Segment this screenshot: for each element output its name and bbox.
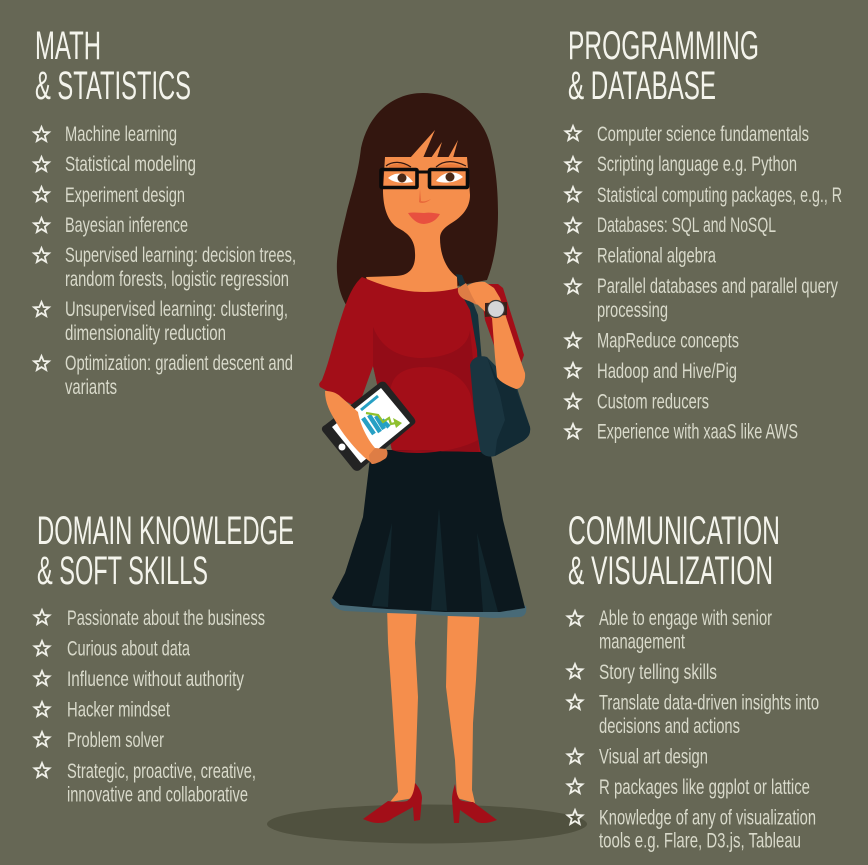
skill list: domain knowledge and soft skills: Curious about data [67,638,190,660]
ground shadow [267,804,587,844]
skill list: math and statistics: Supervised learning: decision trees, [65,244,296,267]
skill list: programming and database: Custom reducers [597,390,709,414]
face and neck [366,157,470,300]
skill list: programming and database [566,123,842,444]
skill list: math and statistics: random forests, logistic regression [65,268,289,291]
skill list: domain knowledge and soft skills: Strategic, proactive, creative, [67,760,256,783]
forehead wedges between fringe strands [410,130,458,158]
heading: math and statistics: MATH [35,24,101,68]
hair [337,93,498,308]
skill list: communication and visualization: Visual art design [599,746,708,768]
bag [470,356,530,457]
skill list: math and statistics: variants [65,376,117,399]
skill list: programming and database: processing [597,299,668,322]
skill list: math and statistics: Statistical modeling [65,153,196,176]
shirt [319,277,482,452]
skill list: math and statistics: dimensionality reduction [65,322,226,345]
wristwatch [485,300,507,318]
skill list: communication and visualization [568,607,819,852]
heading: communication and visualization [568,509,780,593]
bag strap [456,274,482,362]
heading: math and statistics [35,24,191,108]
skirt [330,450,526,618]
skill list: programming and database: Databases: SQL and NoSQL [597,214,776,237]
tablet chart [361,396,402,434]
skill list: domain knowledge and soft skills: Influence without authority [67,668,244,691]
right arm [466,282,525,389]
skill list: domain knowledge and soft skills [34,607,265,806]
skill list: math and statistics: Machine learning [65,123,177,146]
panel: math and statistics [34,24,296,399]
nose [419,189,431,203]
skill list: math and statistics [34,123,296,399]
heading: math and statistics: & STATISTICS [35,64,191,108]
bag shadow fold [487,357,530,456]
red shoes [363,783,497,823]
glasses [381,170,468,188]
illustration: woman data scientist [267,93,587,844]
skill list: programming and database: Relational algebra [597,244,716,268]
skill list: domain knowledge and soft skills: Hacker mindset [67,698,170,722]
skill list: communication and visualization: management [599,630,685,654]
shirt shading [373,327,479,453]
panel: communication and visualization [568,509,819,852]
heading: domain knowledge and soft skills: DOMAIN KNOWLEDGE [37,509,294,553]
eyebrows [386,162,466,167]
skill list: communication and visualization: decisions and actions [599,715,740,738]
eye shadow [389,164,463,171]
heading: programming and database: & DATABASE [568,64,716,108]
skill list: programming and database: MapReduce concepts [597,330,739,352]
skill list: domain knowledge and soft skills: innovative and collaborative [67,784,248,806]
legs [387,605,480,803]
left arm [325,391,375,463]
left hand [369,448,388,464]
skill list: math and statistics: Experiment design [65,184,185,207]
skill list: programming and database: Hadoop and Hive/Pig [597,360,737,383]
skill list: domain knowledge and soft skills: Passionate about the business [67,607,265,630]
skill list: communication and visualization: Story telling skills [599,661,717,684]
eyes [388,172,463,183]
heading: domain knowledge and soft skills [37,509,294,593]
skill list: math and statistics: Optimization: gradient descent and [65,352,293,375]
right hand shade [458,283,477,305]
panel: programming and database [566,24,842,444]
lips [408,213,440,224]
skill list: communication and visualization: Able to engage with senior [599,607,772,630]
shirt back behind right arm [480,284,524,366]
heading: programming and database [568,24,759,108]
skill list: math and statistics: Unsupervised learning: clustering, [65,298,288,321]
heading: domain knowledge and soft skills: & SOFT SKILLS [37,549,208,593]
skill list: domain knowledge and soft skills: Problem solver [67,729,164,752]
tablet [322,382,415,471]
panel: domain knowledge and soft skills [34,509,294,806]
skill list: math and statistics: Bayesian inference [65,214,188,237]
